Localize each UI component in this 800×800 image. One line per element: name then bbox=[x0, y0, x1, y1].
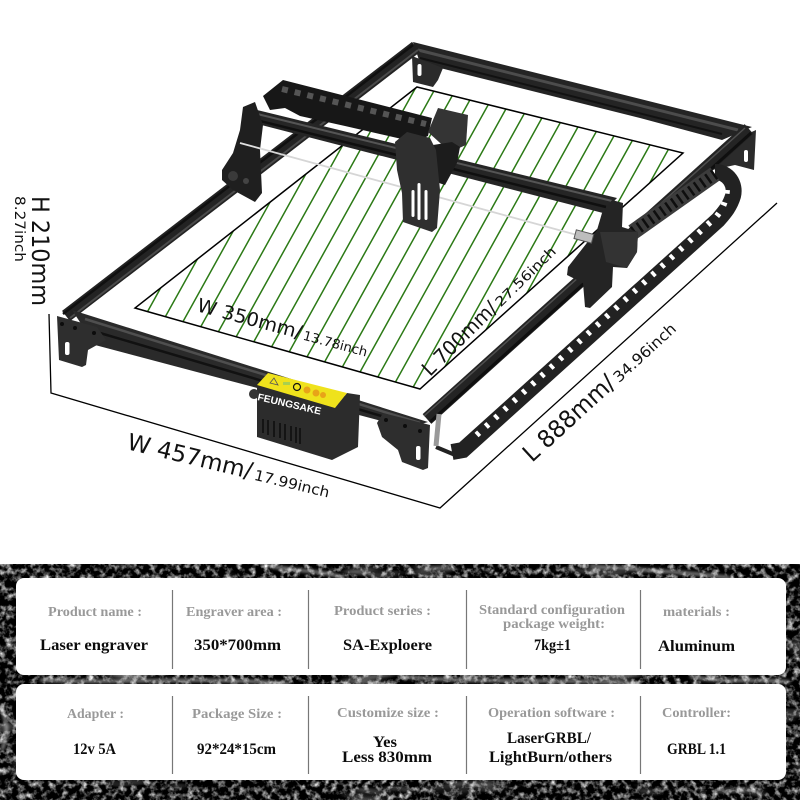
spec: controller: Controller: bbox=[662, 706, 731, 721]
chain upper run bbox=[633, 174, 715, 232]
label: W 350mm: W 350mm/ bbox=[195, 295, 305, 344]
spec: product name: Laser engraver bbox=[40, 637, 148, 654]
rod end clamp bbox=[574, 230, 594, 243]
spec: controller: GRBL 1.1 bbox=[667, 741, 726, 758]
label: L 888mm bbox=[517, 314, 681, 467]
label: W 350mm bbox=[195, 295, 370, 361]
right rail bbox=[424, 128, 751, 422]
cable chain bbox=[436, 172, 734, 457]
label: L 700mm bbox=[417, 239, 560, 381]
label: W 457mm bbox=[125, 430, 333, 503]
brand text: FEUNGSAKE bbox=[256, 392, 322, 418]
spec: operation software: LaserGRBL/ bbox=[507, 730, 592, 747]
spec: controller bbox=[662, 706, 731, 758]
spec: adapter: 12v 5A bbox=[73, 741, 117, 758]
spec: adapter bbox=[67, 707, 124, 758]
back-right bracket bbox=[712, 130, 756, 170]
spec: operation software: LightBurn/others bbox=[489, 749, 612, 766]
label: L 888mm: L 888mm/ bbox=[517, 369, 621, 467]
module body bbox=[257, 385, 360, 460]
label: L 700mm: L 700mm/ bbox=[417, 296, 502, 381]
label: H 210mm: H 210mm bbox=[26, 196, 54, 306]
back rail bbox=[413, 42, 752, 140]
spec: package weight: 7kg±1 bbox=[534, 637, 571, 654]
gantry beam bbox=[242, 107, 617, 213]
spec: engraver area: Engraver area : bbox=[186, 605, 282, 620]
left rail bbox=[63, 45, 418, 318]
spec: adapter: Adapter : bbox=[67, 707, 124, 722]
spec: product series bbox=[334, 604, 432, 654]
dimension lines bbox=[49, 203, 777, 508]
module side cap bbox=[249, 389, 259, 399]
front-left bracket bbox=[57, 316, 106, 367]
spec: product name bbox=[40, 605, 148, 654]
front rail bbox=[72, 310, 428, 428]
spec: package size: 92*24*15cm bbox=[197, 741, 276, 758]
label: 8.27inch: 8.27inch bbox=[11, 196, 27, 262]
label: W 457mm: W 457mm/ bbox=[125, 430, 255, 485]
spec: engraver area: 350*700mm bbox=[194, 637, 281, 654]
label: L 888mm: 34.96inch bbox=[610, 320, 680, 386]
panel: specifications row 2 bbox=[16, 684, 786, 780]
spec: package size bbox=[192, 707, 282, 758]
work area with green engraving lines bbox=[134, 86, 684, 390]
vent slots bbox=[263, 419, 300, 444]
spec: materials: Aluminum bbox=[658, 638, 735, 655]
spec: operation software: Operation software : bbox=[488, 706, 615, 721]
laser module bbox=[249, 373, 360, 460]
spec: customize size: Yes bbox=[373, 734, 397, 751]
spec: package weight bbox=[479, 603, 625, 654]
laser head plate bbox=[395, 132, 460, 232]
spec: package weight: Standard configuration bbox=[479, 603, 625, 618]
panel: specifications row 1 bbox=[16, 578, 786, 675]
spec: operation software bbox=[488, 706, 615, 766]
spec: product name: Product name : bbox=[48, 605, 142, 620]
spec: product series: SA-Exploere bbox=[343, 637, 432, 654]
spec: materials bbox=[658, 605, 735, 655]
spec: product series: Product series : bbox=[334, 604, 431, 619]
spec: customize size: Customize size : bbox=[337, 706, 439, 721]
label: W 457mm: 17.99inch bbox=[252, 468, 331, 501]
chain end bracket bbox=[436, 414, 460, 457]
spec: package size: Package Size : bbox=[192, 707, 282, 722]
textured dark background band bbox=[0, 564, 800, 800]
stepper motor bbox=[428, 108, 468, 152]
right carriage plate bbox=[567, 200, 638, 308]
back-left bracket bbox=[412, 56, 443, 87]
spec: materials: materials : bbox=[663, 605, 730, 620]
spec: customize size: Less 830mm bbox=[342, 749, 432, 766]
spec: customize size bbox=[337, 706, 439, 766]
engraver frame bbox=[57, 42, 756, 470]
guide rod bbox=[240, 143, 577, 235]
top cable chain bbox=[263, 80, 432, 142]
label: W 350mm: 13.78inch bbox=[301, 329, 369, 360]
left carriage plate bbox=[222, 102, 263, 202]
chain lower run and curve bbox=[452, 172, 734, 452]
front-right bracket bbox=[377, 413, 430, 470]
spec: engraver area bbox=[186, 605, 282, 654]
gantry assembly bbox=[222, 80, 638, 308]
spec: package weight: package weight: bbox=[503, 617, 605, 632]
label: L 700mm: 27.56inch bbox=[492, 244, 560, 310]
yellow label bbox=[257, 373, 347, 408]
